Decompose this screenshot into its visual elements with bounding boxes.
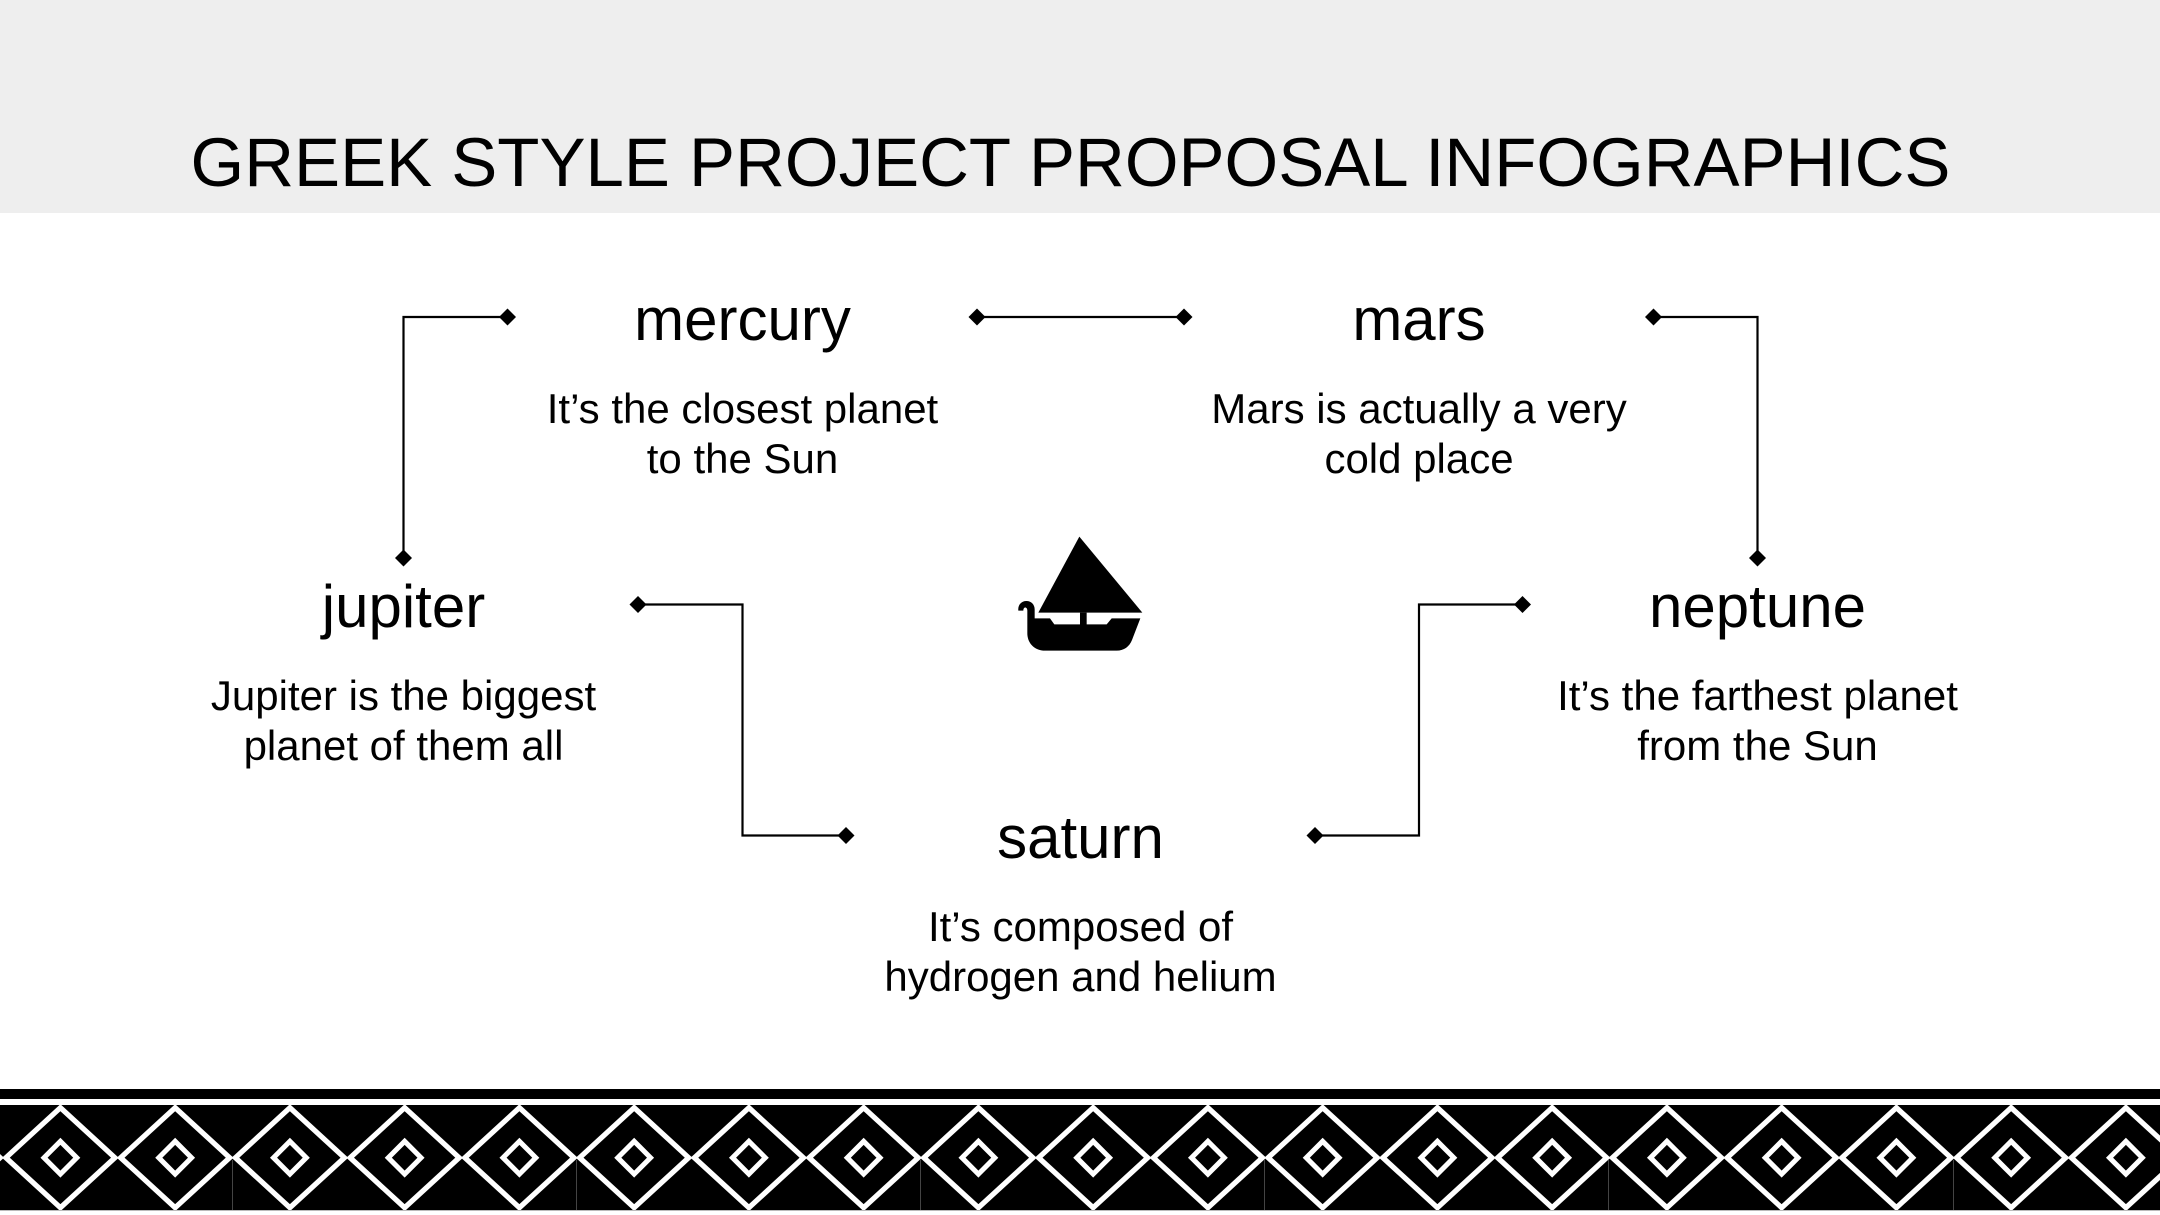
block: mars: cold place bbox=[1324, 435, 1514, 482]
block: neptune: neptune bbox=[1649, 573, 1866, 640]
block: mars: Mars is actually a very bbox=[1211, 385, 1627, 432]
header band bbox=[0, 0, 2160, 213]
block: jupiter: planet of them all bbox=[244, 722, 563, 769]
block: mars: mars bbox=[1352, 286, 1486, 353]
block: saturn: It’s composed of bbox=[928, 903, 1233, 950]
block: saturn bbox=[884, 804, 1277, 1000]
connector: mercury to mars bbox=[968, 308, 1192, 326]
block: mercury bbox=[547, 286, 939, 482]
block: neptune: It’s the farthest planet bbox=[1557, 672, 1958, 719]
connector: jupiter to saturn bbox=[630, 596, 854, 844]
decorative border: diamond pattern bbox=[0, 1105, 2160, 1210]
decorative border: top bar bbox=[0, 1089, 2160, 1099]
connector: saturn to neptune bbox=[1306, 596, 1531, 844]
block: jupiter: Jupiter is the biggest bbox=[211, 672, 596, 719]
block: neptune: from the Sun bbox=[1637, 722, 1878, 769]
block: jupiter bbox=[211, 573, 596, 769]
block: neptune bbox=[1557, 573, 1958, 769]
block: jupiter: jupiter bbox=[320, 573, 485, 640]
icon: sailing ship bbox=[1018, 537, 1142, 651]
block: mercury: to the Sun bbox=[647, 435, 838, 482]
connector: mars to neptune bbox=[1645, 308, 1766, 566]
title: GREEK STYLE PROJECT PROPOSAL INFOGRAPHICS bbox=[191, 124, 1950, 201]
block: mercury: mercury bbox=[634, 286, 851, 353]
block: saturn: hydrogen and helium bbox=[884, 953, 1277, 1000]
block: saturn: saturn bbox=[997, 804, 1164, 871]
block: mercury: It’s the closest planet bbox=[547, 385, 939, 432]
block: mars bbox=[1211, 286, 1627, 482]
connector: jupiter to mercury bbox=[395, 308, 516, 566]
